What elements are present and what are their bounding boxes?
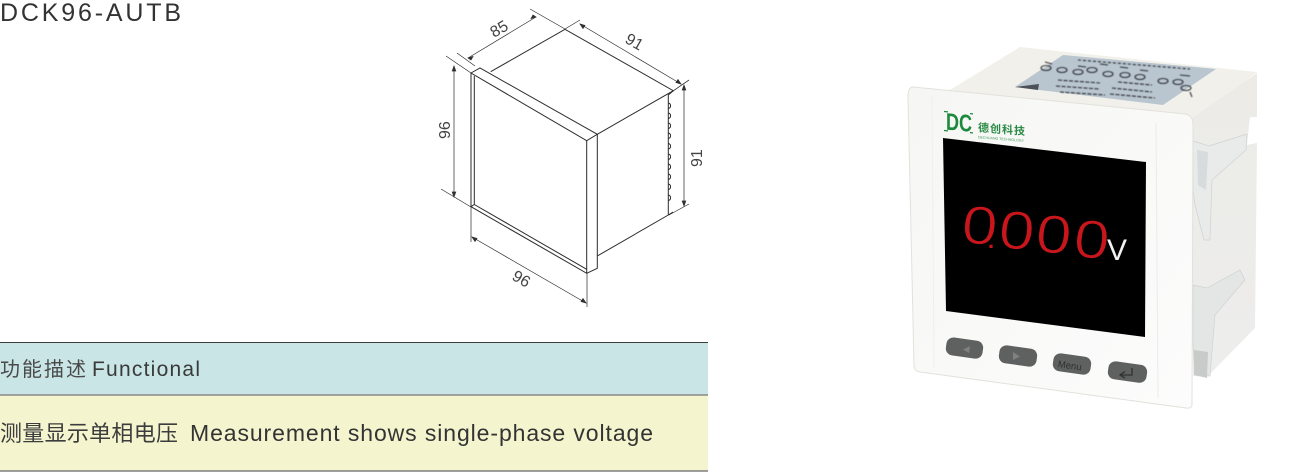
dimension: 96 bottom <box>471 207 587 307</box>
company logo: 德创科技 <box>978 120 1025 138</box>
label sticker <box>1015 55 1216 105</box>
dimension: 85 <box>457 9 565 66</box>
rear clips <box>1193 134 1247 378</box>
dimension: 96 left: 96 <box>437 121 454 139</box>
decimal point: . <box>988 228 994 253</box>
dimension: 96 left <box>437 56 471 207</box>
product photo: panel meter <box>908 47 1257 408</box>
company logo: DC <box>946 109 972 138</box>
reading: 0.000: 0 <box>1033 202 1075 266</box>
reading: 0.000: 0 <box>959 193 1001 257</box>
meter outline <box>471 29 673 273</box>
panel: function table <box>0 342 708 471</box>
unit: V: V <box>1107 234 1127 267</box>
company logo <box>944 109 1025 143</box>
body row: measurement description <box>0 395 708 471</box>
button: menu <box>1052 352 1092 376</box>
reading: 0.000: 0 <box>1071 207 1113 271</box>
dimension line drawing <box>437 9 706 307</box>
button: left <box>945 337 984 360</box>
side housing <box>1192 73 1257 377</box>
front buttons <box>945 337 1148 384</box>
dimension: 91 right <box>669 80 706 215</box>
front bezel <box>908 87 1193 408</box>
button: menu: Menu <box>1057 359 1082 373</box>
dimension: 91 top <box>565 20 689 91</box>
company logo: DECHUANG TECHNOLOGY <box>978 135 1025 143</box>
header row: functional: 功能描述 <box>0 358 86 381</box>
top housing <box>930 47 1257 122</box>
button: right <box>998 344 1038 368</box>
dimension: 85: 85 <box>488 18 512 41</box>
dimension: 91 right: 91 <box>689 149 706 167</box>
dimension: 96 bottom: 96 <box>509 268 533 291</box>
black display <box>943 138 1146 337</box>
header row: functional: Functional <box>92 358 200 381</box>
reading: 0.000: 0 <box>996 198 1038 262</box>
body row: measurement description: 测量显示单相电压 <box>0 421 178 446</box>
header row: functional <box>0 342 708 395</box>
body row: measurement description: Measurement shows single-phase voltage <box>190 420 653 446</box>
dimension: 91 top: 91 <box>622 31 646 54</box>
reading: 0.000 <box>959 193 1113 271</box>
button: enter <box>1107 360 1148 384</box>
